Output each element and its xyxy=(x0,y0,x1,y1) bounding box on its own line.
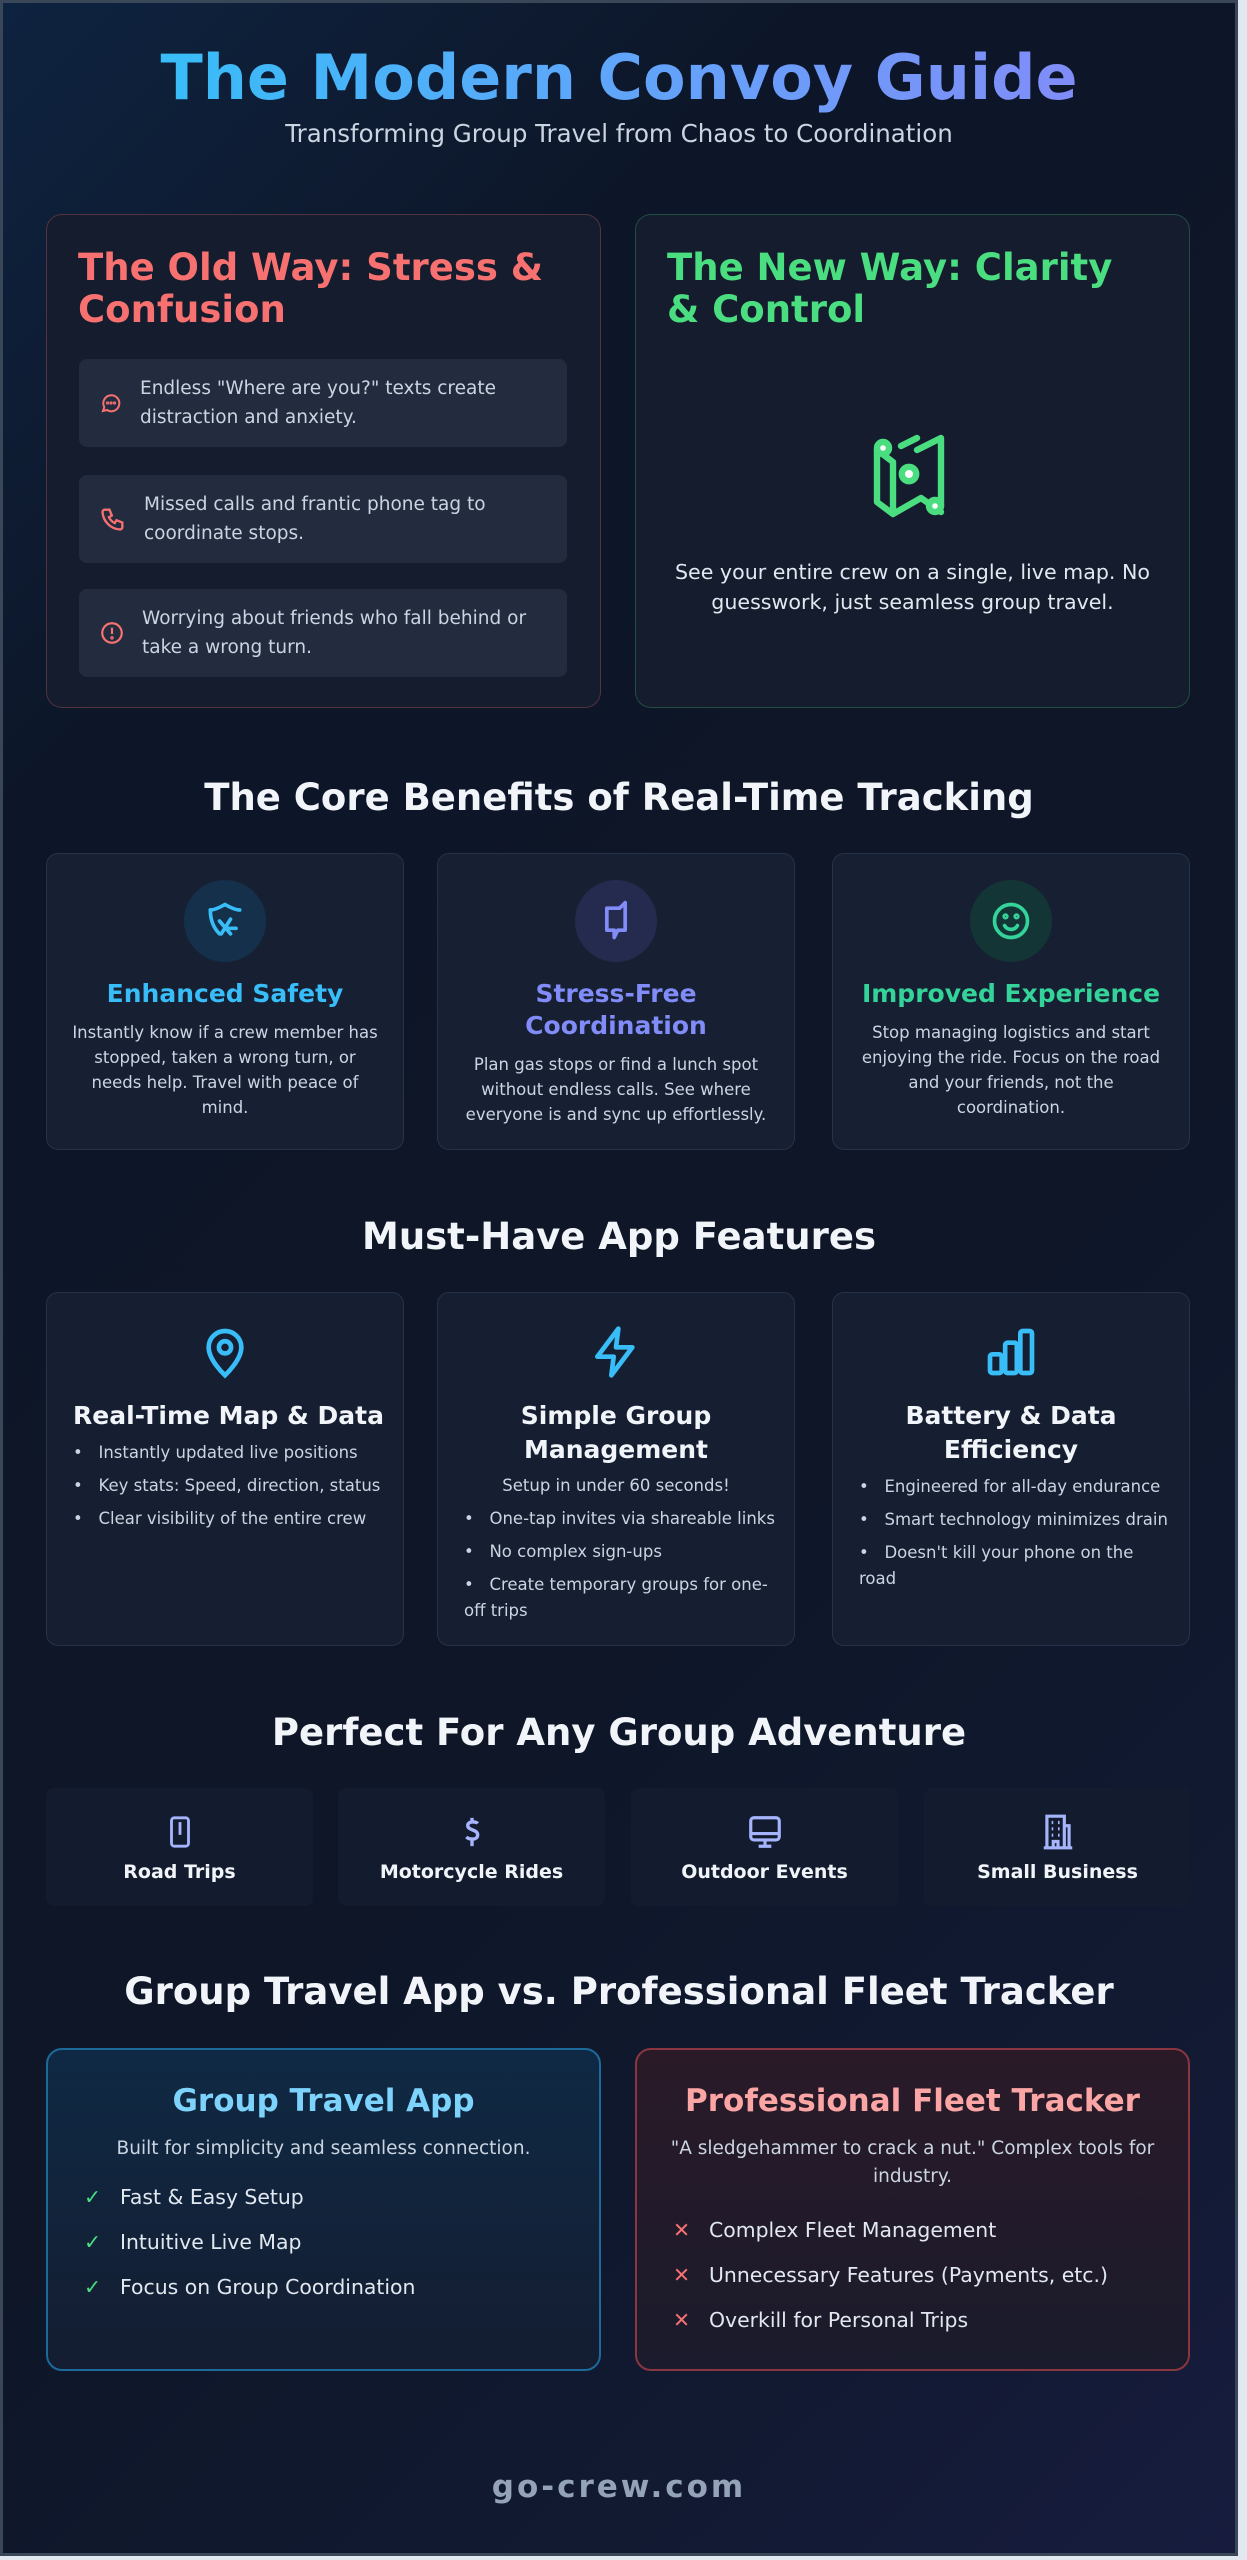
panel: new way xyxy=(635,214,1190,708)
card: group management: • One-tap invites via shareable links xyxy=(464,1509,775,1528)
text xyxy=(72,1023,378,1117)
card: group management: • No complex sign-ups xyxy=(464,1542,662,1561)
heading: new way xyxy=(667,246,1112,331)
card: outdoor events xyxy=(631,1788,898,1906)
card: group management: • Create temporary groups for one- xyxy=(464,1575,768,1594)
list: road xyxy=(859,1569,896,1588)
card: small business xyxy=(924,1788,1191,1906)
icon: dollar xyxy=(465,1818,480,1846)
text: everyone is and sync up effortlessly. xyxy=(466,1105,766,1124)
card: improved experience xyxy=(832,853,1190,1150)
list xyxy=(73,1443,380,1528)
list: • Doesn't kill your phone on the xyxy=(859,1543,1133,1562)
title: Professional Fleet Tracker xyxy=(685,2083,1140,2119)
card: group management xyxy=(437,1292,795,1646)
list: pros: ✓ xyxy=(84,2230,101,2254)
list: cons: ✕ xyxy=(673,2218,690,2242)
card: outdoor events: Outdoor Events xyxy=(681,1861,848,1883)
icon: phone xyxy=(170,1816,190,1848)
heading: use cases: Perfect For Any Group Adventure xyxy=(272,1711,966,1754)
text: new way description: See your entire crew on a single, live map. No xyxy=(675,560,1150,584)
card: battery xyxy=(832,1292,1190,1646)
panel: fleet tracker xyxy=(635,2048,1190,2371)
text: mind. xyxy=(202,1098,248,1117)
heading: features: Must-Have App Features xyxy=(362,1215,876,1258)
list: pros: ✓ xyxy=(84,2275,101,2299)
card: small business: Small Business xyxy=(977,1861,1138,1883)
footer: go-crew.com xyxy=(492,2469,746,2505)
icon: smile xyxy=(970,880,1052,962)
title: Coordination xyxy=(525,1011,707,1040)
list: pros: ✓ xyxy=(84,2185,101,2209)
heading: core benefits: The Core Benefits of Real-Time Tracking xyxy=(204,776,1034,819)
list: • Engineered for all-day endurance xyxy=(859,1477,1160,1496)
title: Group Travel App xyxy=(172,2083,475,2119)
card: real-time map xyxy=(46,1292,404,1646)
list: pros: Fast & Easy Setup xyxy=(120,2185,304,2209)
icon: bars xyxy=(988,1328,1034,1376)
title xyxy=(525,979,707,1040)
icon: chat xyxy=(575,880,657,962)
list: • Instantly updated live positions xyxy=(73,1443,358,1462)
list: cons: Unnecessary Features (Payments, etc.) xyxy=(709,2263,1108,2287)
card: motorcycle rides: Motorcycle Rides xyxy=(380,1861,563,1883)
card: group management: off trips xyxy=(464,1601,528,1620)
card: road trips xyxy=(46,1788,313,1906)
item: worry: take a wrong turn. xyxy=(142,637,312,658)
title: Management xyxy=(524,1435,708,1464)
list xyxy=(859,1477,1168,1588)
title: Enhanced Safety xyxy=(107,979,343,1008)
subtitle: Built for simplicity and seamless connection. xyxy=(117,2138,530,2159)
icon: shield xyxy=(184,880,266,962)
icon: chat bubble xyxy=(102,394,120,412)
item: calls: coordinate stops. xyxy=(144,523,304,544)
icon: monitor xyxy=(749,1816,781,1848)
title: Real-Time Map & Data xyxy=(73,1401,384,1430)
icon: location pin xyxy=(206,1328,244,1378)
title: Improved Experience xyxy=(862,979,1160,1008)
title: Simple Group xyxy=(521,1401,711,1430)
item: texts: Endless "Where are you?" texts create xyxy=(140,378,496,399)
item: calls: Missed calls and frantic phone tag to xyxy=(144,494,486,515)
list: pros: Focus on Group Coordination xyxy=(120,2275,415,2299)
icon: lightning xyxy=(595,1326,635,1378)
card: road trips: Road Trips xyxy=(123,1861,236,1883)
text: new way description: guesswork, just seamless group travel. xyxy=(711,590,1114,614)
text xyxy=(862,1023,1160,1117)
card: enhanced safety xyxy=(46,853,404,1150)
text: and your friends, not the xyxy=(908,1073,1114,1092)
heading: old way xyxy=(78,246,543,331)
list: pros: Intuitive Live Map xyxy=(120,2230,301,2254)
list: cons xyxy=(673,2218,1108,2332)
subtitle: Transforming Group Travel from Chaos to Coordination xyxy=(285,119,953,148)
card: stress-free coordination xyxy=(437,853,795,1150)
text: new way description xyxy=(675,560,1150,614)
title: Battery & Data xyxy=(905,1401,1117,1430)
heading: new way: The New Way: Clarity xyxy=(667,246,1112,289)
heading: comparison: Group Travel App vs. Professional Fleet Tracker xyxy=(124,1970,1114,2013)
title: Stress-Free xyxy=(535,979,697,1008)
text: enjoying the ride. Focus on the road xyxy=(862,1048,1160,1067)
heading: old way: Confusion xyxy=(78,288,286,331)
text: Instantly know if a crew member has xyxy=(72,1023,378,1042)
text: coordination. xyxy=(957,1098,1065,1117)
card: motorcycle rides xyxy=(338,1788,605,1906)
list: cons: Complex Fleet Management xyxy=(709,2218,996,2242)
list: • Clear visibility of the entire crew xyxy=(73,1509,366,1528)
panel: old way xyxy=(46,214,601,708)
text xyxy=(466,1055,766,1124)
item: texts: distraction and anxiety. xyxy=(140,407,357,428)
list: • Smart technology minimizes drain xyxy=(859,1510,1168,1529)
heading: new way: & Control xyxy=(667,288,865,331)
item: texts xyxy=(79,359,567,447)
text: Stop managing logistics and start xyxy=(872,1023,1150,1042)
list: cons: ✕ xyxy=(673,2308,690,2332)
text: Plan gas stops or find a lunch spot xyxy=(474,1055,758,1074)
subtitle: industry. xyxy=(873,2166,952,2187)
icon: map with pins xyxy=(874,434,944,518)
subtitle xyxy=(671,2138,1154,2187)
heading: old way: The Old Way: Stress & xyxy=(78,246,543,289)
text: needs help. Travel with peace of xyxy=(92,1073,358,1092)
title: The Modern Convoy Guide xyxy=(160,41,1078,114)
text: stopped, taken a wrong turn, or xyxy=(94,1048,356,1067)
item: worry xyxy=(79,589,567,677)
item: worry: Worrying about friends who fall behind or xyxy=(142,608,526,629)
subtitle: "A sledgehammer to crack a nut." Complex tools for xyxy=(671,2138,1154,2159)
title xyxy=(905,1401,1117,1464)
text: without endless calls. See where xyxy=(481,1080,751,1099)
list: pros xyxy=(84,2185,415,2299)
icon: building xyxy=(1044,1814,1072,1850)
list: cons: ✕ xyxy=(673,2263,690,2287)
list: Setup in under 60 seconds! xyxy=(502,1476,730,1495)
title: Efficiency xyxy=(944,1435,1078,1464)
list: cons: Overkill for Personal Trips xyxy=(709,2308,968,2332)
panel: group travel app xyxy=(46,2048,601,2371)
list: • Key stats: Speed, direction, status xyxy=(73,1476,380,1495)
icon: alert xyxy=(101,622,123,644)
item: calls xyxy=(79,475,567,563)
icon: phone xyxy=(101,508,124,531)
title xyxy=(521,1401,711,1464)
